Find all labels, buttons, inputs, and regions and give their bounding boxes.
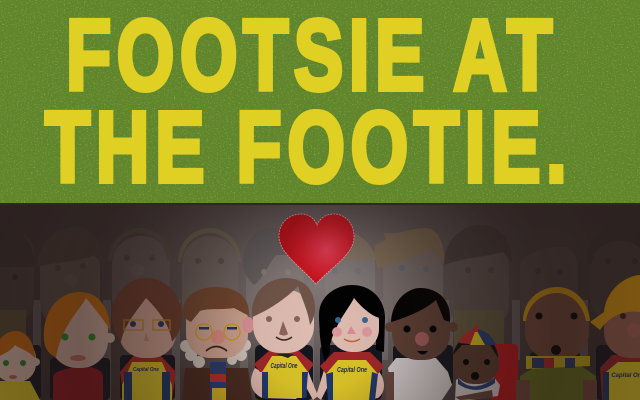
shirt logo: Capital One (270, 363, 298, 370)
title (45, 0, 567, 203)
arms (316, 370, 334, 400)
spectator 5 (243, 228, 304, 330)
spectator: grumpy historical gentleman (180, 287, 252, 400)
spectator 1 (0, 229, 34, 360)
title: FOOTSIE AT (66, 0, 552, 111)
spectator: bald fan with scarf (516, 287, 597, 400)
title: THE FOOTIE. (45, 91, 567, 203)
spectator 10 (586, 230, 640, 325)
spectator 7 (374, 228, 445, 328)
seats (33, 300, 588, 400)
spectator 6 (325, 231, 376, 318)
spectator: small child in orange hair (0, 331, 40, 400)
spectator 8 (444, 225, 512, 360)
spectator: red-haired person (44, 292, 115, 400)
arms (251, 368, 300, 399)
shirt logo: Capital One (337, 367, 367, 374)
panel: stadium crowd (0, 203, 640, 400)
panel: grass title banner (0, 0, 640, 204)
spectator 4 (178, 228, 241, 331)
back row of spectators (0, 225, 640, 400)
spectator 9 (520, 227, 580, 325)
shirt logo: Capital One (133, 367, 159, 373)
seat backs of front row (20, 345, 640, 400)
scarf (526, 356, 590, 369)
heart balloon (279, 214, 354, 284)
spectator: boy with brown hair (242, 278, 330, 400)
spectator 2 (37, 227, 103, 330)
spectator: blonde fan at right edge (590, 275, 640, 400)
spectator: long brown hair with glasses (112, 278, 182, 400)
spectator: girl with black hair (316, 285, 385, 400)
spectator: boy in white T-shirt (385, 288, 458, 400)
red seat (490, 344, 518, 400)
vignette lighting overlay (0, 205, 640, 400)
spectator: baby with propeller hat (453, 325, 500, 400)
spectator 3 (108, 228, 172, 326)
